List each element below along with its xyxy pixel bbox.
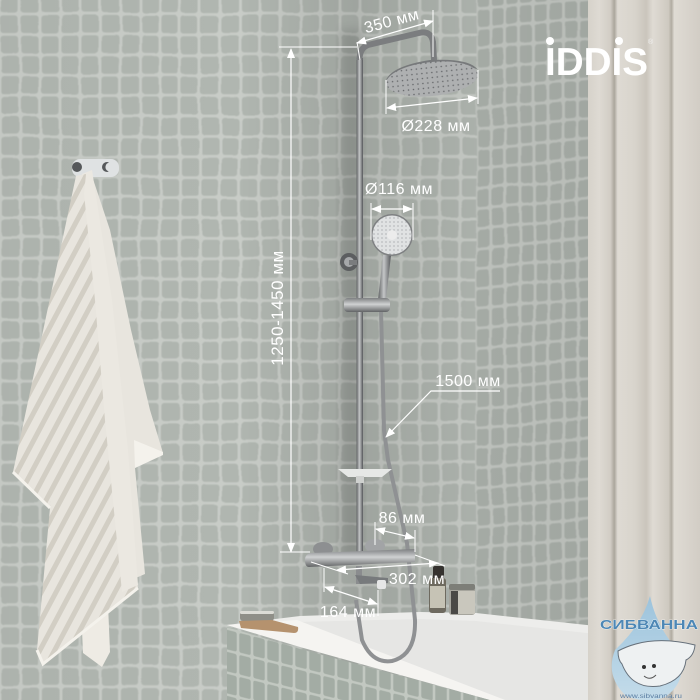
dimension: 1500 mm hose bbox=[386, 373, 501, 437]
dimension: 116 mm diameter bbox=[365, 181, 433, 240]
tub spout bbox=[355, 566, 388, 589]
icon: wooden brush on bath ledge bbox=[239, 611, 298, 633]
dimension: 1250-1450 mm height bbox=[268, 47, 357, 552]
logo: IDDIS: IDDIS bbox=[545, 41, 648, 84]
rain shower head bbox=[384, 57, 480, 101]
sliding holder bbox=[344, 298, 390, 312]
dimension: 350 mm bbox=[357, 6, 433, 60]
illustration: hanging towel bbox=[13, 170, 163, 667]
icon: jar bbox=[449, 584, 475, 615]
icon: water drop bbox=[612, 596, 681, 700]
dimension: 1250-1450 mm height: 1250-1450 мм bbox=[268, 250, 287, 366]
hand shower bbox=[371, 214, 413, 300]
dimension: 164 mm bbox=[320, 568, 378, 621]
dimension: 350 mm: 350 мм bbox=[363, 6, 421, 37]
dimension: 86 mm bbox=[375, 510, 425, 552]
flexible hose bbox=[356, 310, 415, 661]
dimension: 164 mm: 164 мм bbox=[320, 604, 376, 621]
thermostat knobs bbox=[313, 542, 333, 556]
dimension: 302 mm: 302 мм bbox=[389, 571, 445, 588]
wall mount bbox=[340, 253, 358, 271]
dimension: 86 mm: 86 мм bbox=[379, 510, 425, 527]
logo: IDDIS: ® bbox=[648, 38, 654, 46]
icon: towel hook bbox=[72, 159, 119, 177]
dimension: 116 mm diameter: Ø116 мм bbox=[365, 181, 433, 198]
panel: shower curtain bbox=[588, 0, 700, 700]
dimension: 228 mm diameter bbox=[386, 70, 478, 135]
dimension: 228 mm diameter: Ø228 мм bbox=[401, 118, 471, 135]
illustration: shower system bbox=[305, 32, 480, 661]
watermark: Sibvanna logo: www.sibvanna.ru bbox=[619, 694, 682, 700]
panel: bathtub bbox=[227, 612, 596, 700]
dimension: 1500 mm hose: 1500 мм bbox=[435, 373, 501, 390]
icon: bottle bbox=[429, 566, 446, 613]
watermark: Sibvanna logo bbox=[600, 596, 699, 700]
shower pole bbox=[356, 58, 363, 558]
dimension: 302 mm bbox=[311, 555, 445, 588]
soap dish bbox=[338, 469, 392, 483]
overhead arm bbox=[360, 32, 434, 60]
watermark: Sibvanna logo: СИБВАННА bbox=[600, 617, 699, 632]
thermostat body bbox=[305, 549, 415, 567]
icon: smiling bath bbox=[618, 641, 695, 687]
